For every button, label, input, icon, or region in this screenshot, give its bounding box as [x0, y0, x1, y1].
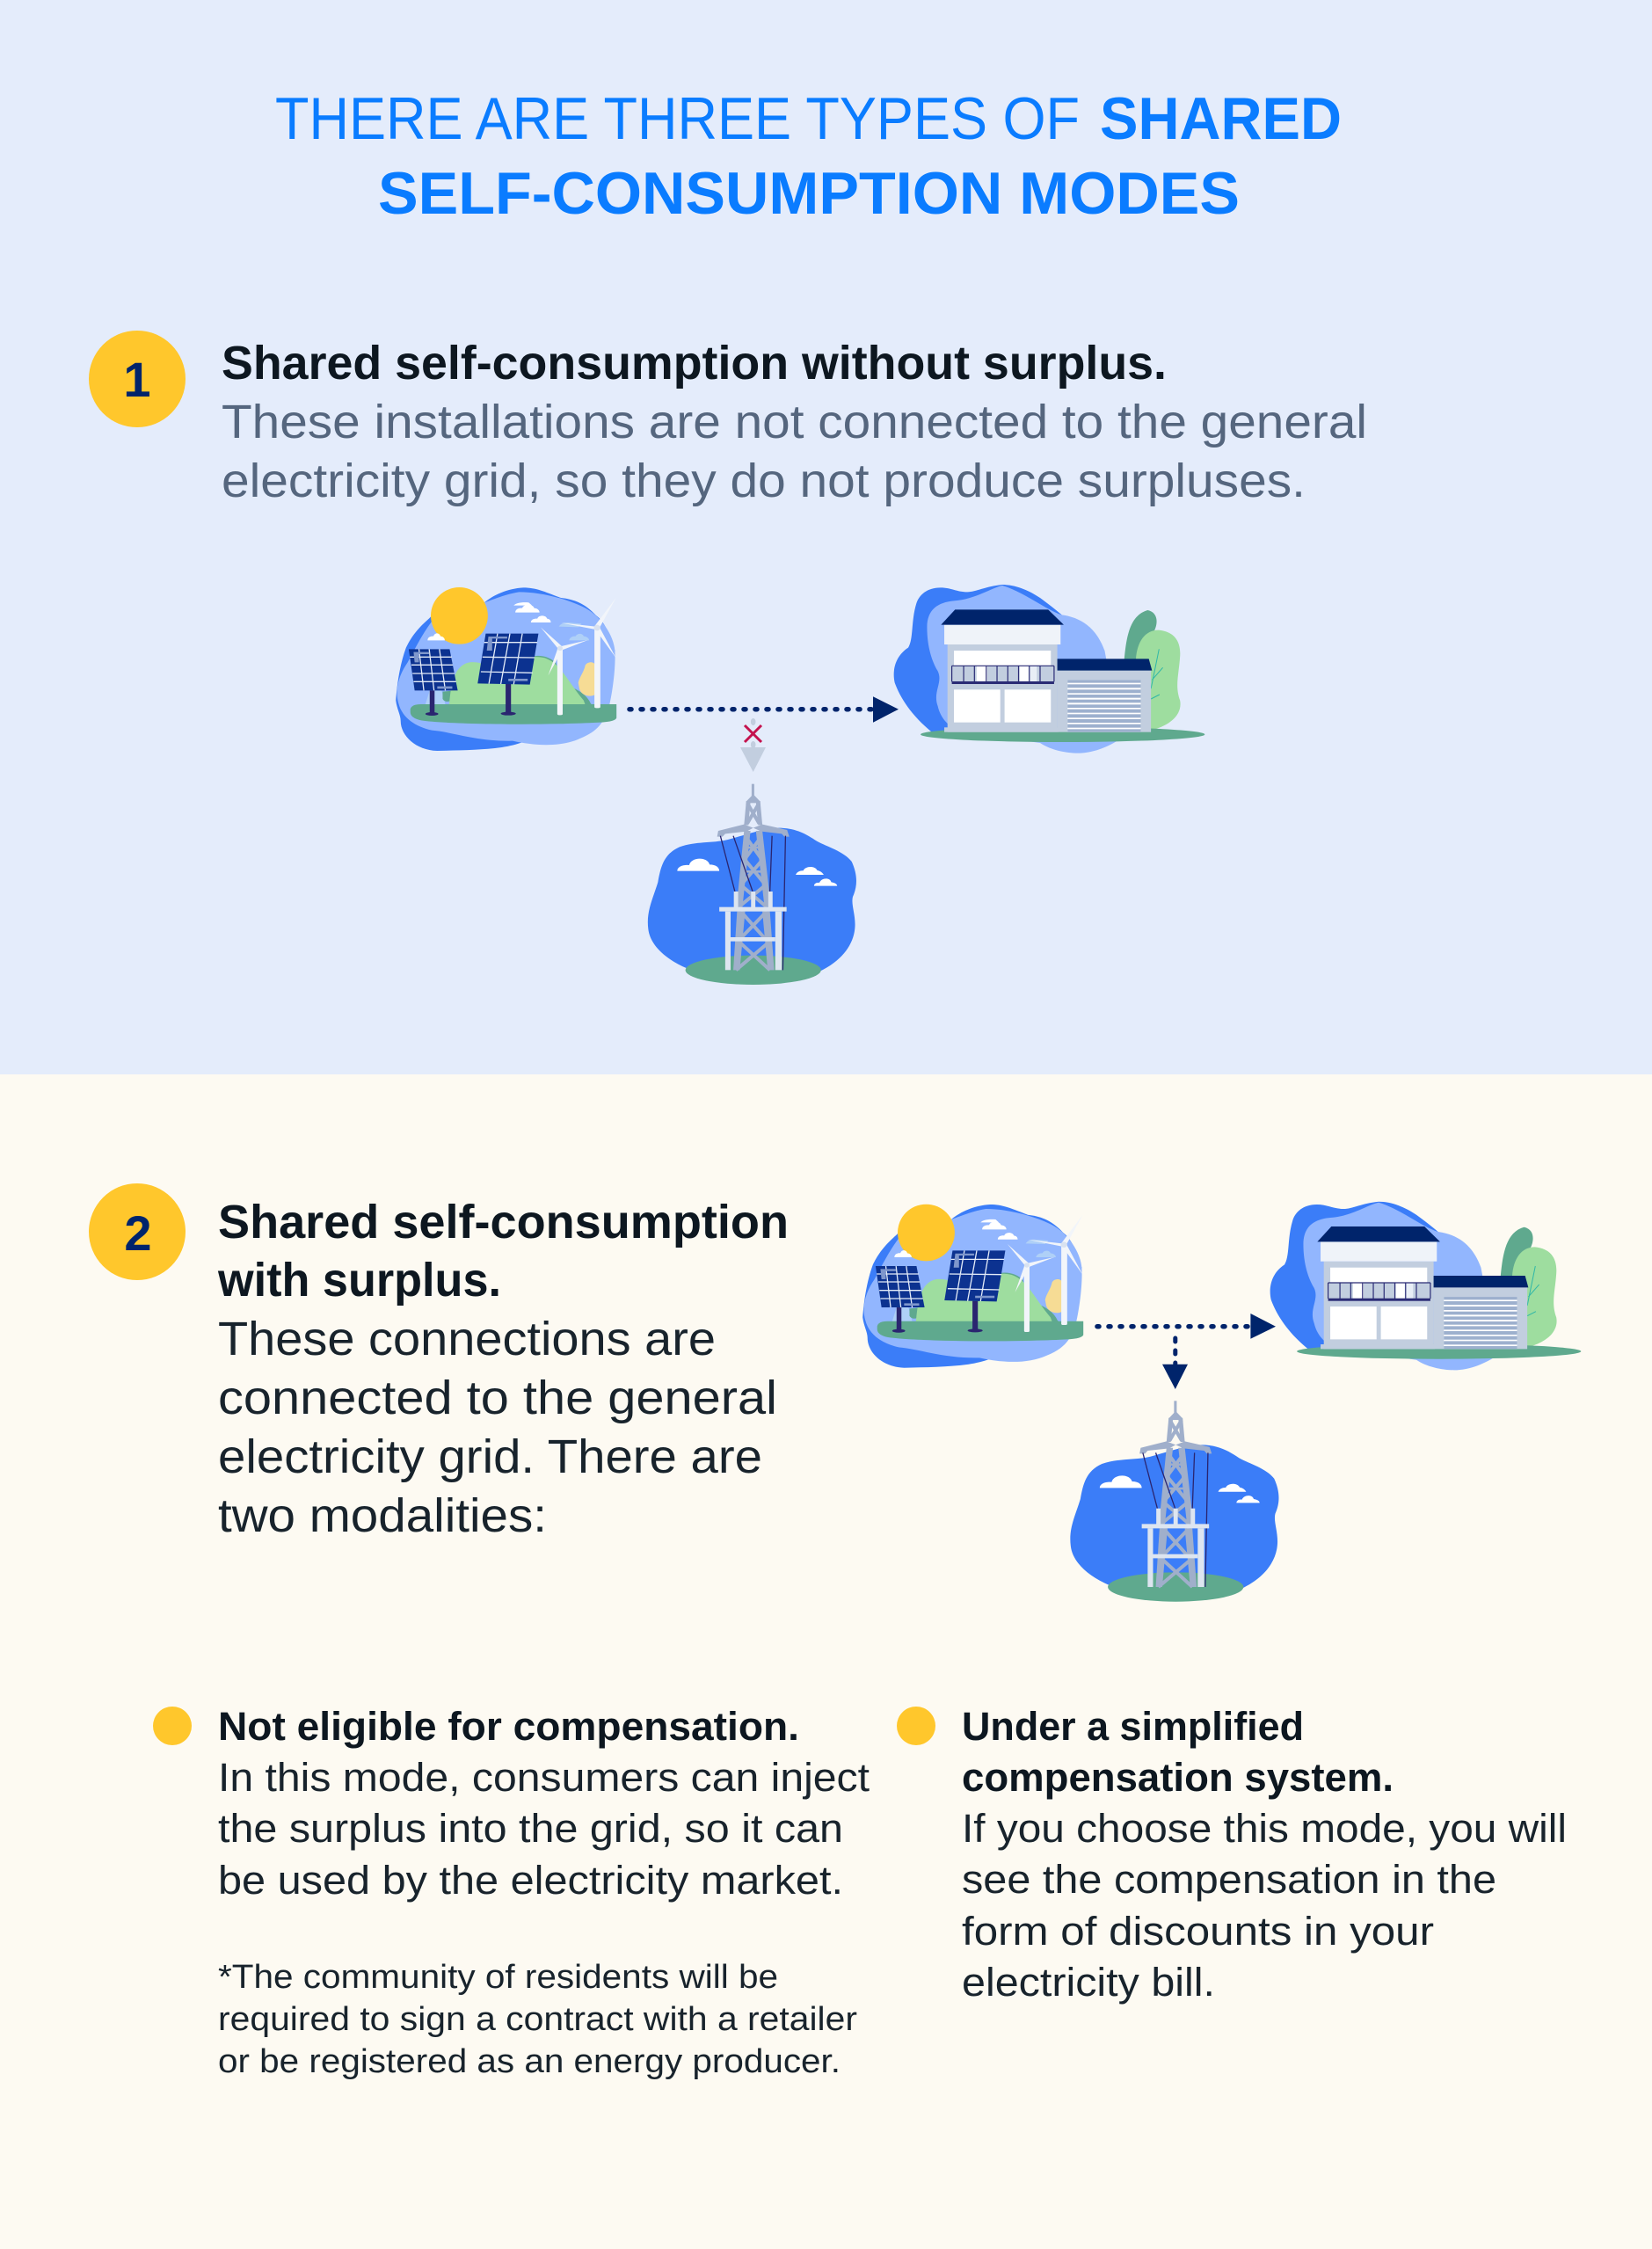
number badge 2	[89, 1183, 186, 1280]
arrow: flow from solar to grid, mode 2	[1162, 1338, 1188, 1389]
icon: solar panels and wind turbines scene	[396, 587, 616, 751]
text block: simplified compensation system: electricity bill.	[962, 1960, 1215, 2005]
text block: not eligible for compensation: In this mode, consumers can inject	[218, 1755, 870, 1800]
title: THERE ARE THREE TYPES OF	[275, 85, 1080, 152]
text block: mode 2 description: These connections are	[218, 1313, 716, 1365]
panel: bottom section background	[0, 1074, 1652, 2249]
text block: not eligible for compensation	[218, 1704, 870, 1903]
text block: mode 1 description	[222, 337, 1367, 507]
text block: mode 1 description: These installations are not connected to the general	[222, 396, 1367, 448]
solar panel right	[477, 634, 538, 716]
text block: simplified compensation system: If you choose this mode, you will	[962, 1806, 1567, 1851]
text block: mode 2 description: electricity grid. There are	[218, 1430, 762, 1483]
number badge 2: 2	[124, 1205, 152, 1261]
text block: mode 2 description: two modalities:	[218, 1489, 547, 1542]
text block: not eligible for compensation: be used by the electricity market.	[218, 1858, 843, 1903]
footnote: *The community of residents will be	[218, 1959, 778, 1996]
icon: solar and wind scene, mode 2	[862, 1205, 1083, 1368]
wind turbine large	[561, 598, 616, 708]
text block: mode 2 description	[217, 1196, 789, 1542]
icon: pylon, mode 2	[1070, 1401, 1278, 1602]
text block: simplified compensation system: compensation system.	[962, 1755, 1394, 1800]
footnote: or be registered as an energy producer.	[218, 2043, 841, 2080]
arrow: flow from solar to house	[630, 696, 899, 723]
text block: simplified compensation system: form of discounts in your	[962, 1909, 1434, 1954]
title: SELF-CONSUMPTION MODES	[378, 160, 1240, 227]
text block: mode 2 description: with surplus.	[217, 1254, 501, 1306]
arrow: flow from solar to house, mode 2	[1097, 1314, 1276, 1339]
wind turbine small	[541, 627, 588, 715]
icon: house, mode 2	[1270, 1202, 1581, 1370]
panel: top section background	[0, 0, 1652, 1074]
garage	[1058, 659, 1152, 732]
text block: simplified compensation system: Under a simplified	[962, 1704, 1304, 1749]
text block: not eligible for compensation: Not eligible for compensation.	[218, 1704, 799, 1749]
number badge 1	[89, 331, 186, 427]
title	[275, 85, 1342, 227]
main building	[941, 609, 1064, 732]
solar panel left	[409, 649, 458, 716]
footnote	[218, 1959, 857, 2080]
plants	[1124, 610, 1181, 730]
text block: not eligible for compensation: the surplus into the grid, so it can	[218, 1806, 843, 1851]
arrow: blocked flow from solar to grid	[740, 718, 766, 772]
text block: mode 1 description: electricity grid, so they do not produce surpluses.	[222, 455, 1306, 507]
text block: mode 2 description: connected to the general	[218, 1372, 777, 1424]
text block: mode 2 description: Shared self-consumption	[218, 1196, 789, 1248]
text block: mode 1 description: Shared self-consumption without surplus.	[222, 337, 1167, 389]
icon: house with garage and plants	[894, 585, 1204, 753]
bullet: simplified compensation	[897, 1707, 935, 1745]
icon: electricity pylon	[648, 784, 856, 985]
icon: red cross	[745, 725, 761, 742]
text block: simplified compensation system: see the compensation in the	[962, 1857, 1496, 1902]
number badge 1: 1	[123, 352, 151, 407]
footnote: required to sign a contract with a retailer	[218, 2001, 857, 2038]
text block: simplified compensation system	[962, 1704, 1567, 2005]
title: SHARED	[1100, 85, 1342, 152]
bullet: not eligible	[153, 1707, 192, 1745]
